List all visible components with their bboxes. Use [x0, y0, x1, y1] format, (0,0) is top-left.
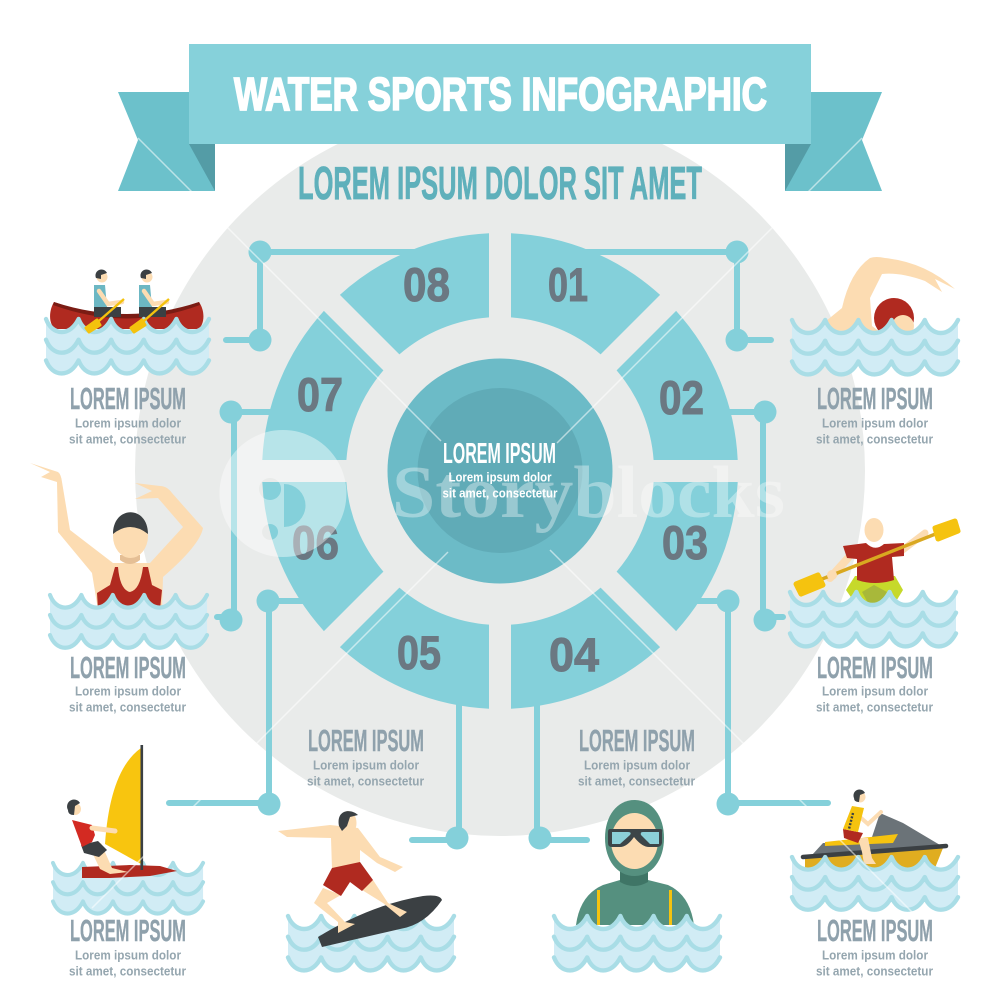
text: segment 04: sit amet, consectetur — [578, 774, 695, 788]
center circle: LOREM IPSUM — [443, 438, 556, 470]
text: segment 04: LOREM IPSUM — [579, 724, 695, 758]
text: segment 05: sit amet, consectetur — [307, 774, 424, 788]
text: kayaker — [816, 651, 933, 714]
text: windsurfer: LOREM IPSUM — [70, 914, 186, 948]
text: segment 05: LOREM IPSUM — [308, 724, 424, 758]
segment numbers: 03 — [662, 516, 708, 569]
watermark — [92, 138, 915, 915]
segment numbers: 01 — [548, 258, 588, 311]
text: canoe: sit amet, consectetur — [69, 432, 186, 446]
segment numbers: 04 — [549, 628, 599, 681]
icon: kayaker — [790, 518, 958, 646]
text: synchronized swimmer: sit amet, consectetur — [69, 700, 186, 714]
center circle: Lorem ipsum dolor — [448, 470, 552, 484]
connector lines — [169, 240, 828, 850]
icon: jet ski — [792, 789, 958, 910]
text: jet ski — [816, 914, 933, 978]
icon: diver — [554, 800, 720, 970]
text: segment 05 — [307, 724, 424, 788]
icon: swimmer — [792, 257, 958, 374]
segment numbers: 06 — [292, 516, 339, 569]
segment numbers: 02 — [659, 371, 704, 424]
text: windsurfer: Lorem ipsum dolor — [75, 948, 181, 962]
segment numbers: 07 — [297, 368, 343, 421]
segment numbers — [292, 258, 708, 681]
text: swimmer: Lorem ipsum dolor — [822, 416, 928, 430]
title ribbon — [118, 44, 882, 191]
icon: canoe — [46, 269, 209, 373]
text: swimmer — [816, 382, 933, 446]
text: windsurfer — [69, 914, 186, 978]
text: canoe — [69, 382, 186, 446]
text: windsurfer: sit amet, consectetur — [69, 964, 186, 978]
text: segment 05: Lorem ipsum dolor — [313, 758, 419, 772]
center circle — [388, 358, 612, 584]
text: jet ski: sit amet, consectetur — [816, 964, 933, 978]
text: synchronized swimmer — [69, 651, 186, 714]
icon: windsurfer — [53, 745, 203, 914]
text: kayaker: sit amet, consectetur — [816, 700, 933, 714]
segment numbers: 08 — [403, 258, 450, 311]
watermark: Storyblocks — [392, 452, 785, 534]
text: synchronized swimmer: Lorem ipsum dolor — [75, 684, 181, 698]
text: synchronized swimmer: LOREM IPSUM — [70, 651, 186, 685]
background circle — [135, 106, 865, 836]
segment numbers: 05 — [397, 626, 441, 679]
text: segment 04: Lorem ipsum dolor — [584, 758, 690, 772]
ring segments — [262, 233, 738, 709]
text: swimmer: sit amet, consectetur — [816, 432, 933, 446]
text: segment 04 — [578, 724, 695, 788]
text: kayaker: Lorem ipsum dolor — [822, 684, 928, 698]
icon: synchronized swimmer — [30, 463, 207, 648]
text: jet ski: Lorem ipsum dolor — [822, 948, 928, 962]
center circle: sit amet, consectetur — [442, 486, 558, 500]
text: canoe: LOREM IPSUM — [70, 382, 186, 416]
text: canoe: Lorem ipsum dolor — [75, 416, 181, 430]
icon: surfer — [278, 811, 454, 970]
title: WATER SPORTS INFOGRAPHIC — [234, 68, 767, 120]
